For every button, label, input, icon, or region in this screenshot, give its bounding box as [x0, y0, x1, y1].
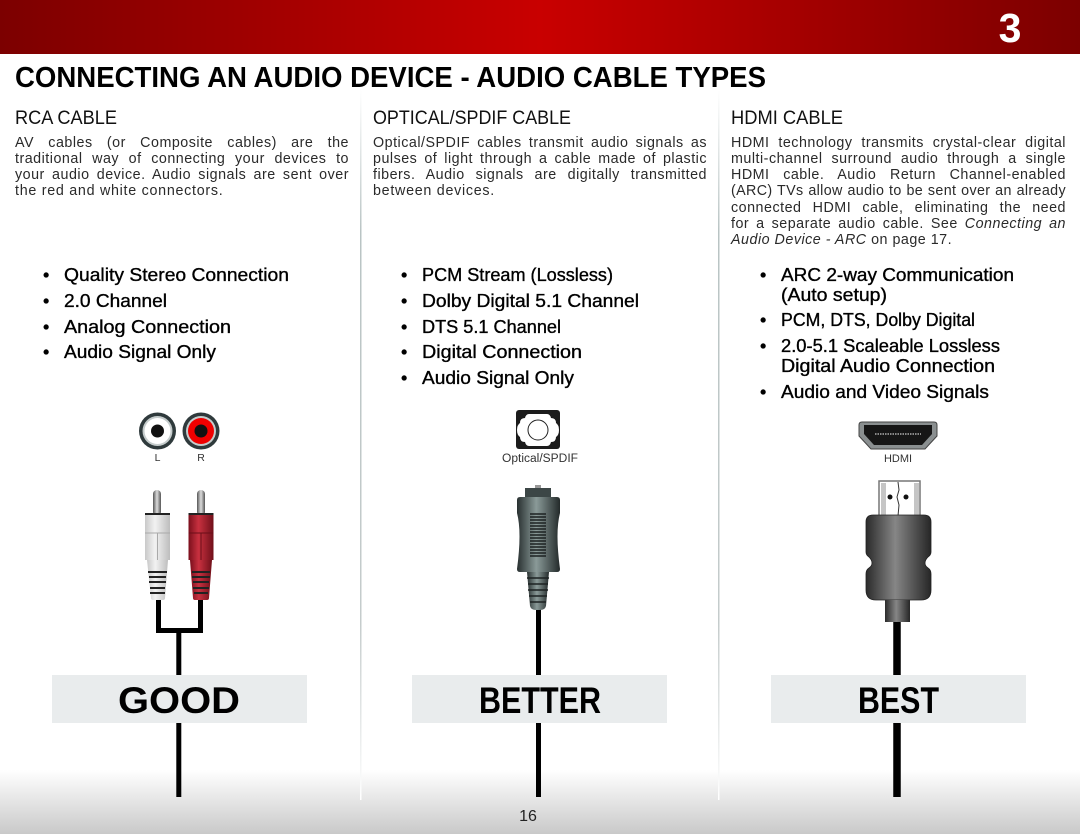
bullet list: Optical features: •: [401, 265, 407, 285]
bullet list: HDMI features: (Auto setup): [781, 285, 887, 305]
bullet list: RCA features: 2.0 Channel: [64, 291, 167, 311]
icon: RCA L and R jacks: R: [197, 452, 205, 464]
rating band: BETTER: [412, 675, 667, 723]
bullet list: Optical features: Audio Signal Only: [422, 368, 574, 388]
bullet list: RCA features: Quality Stereo Connection: [64, 265, 289, 285]
panel: HDMI cable: [730, 108, 1066, 797]
bullet list: HDMI features: •: [760, 265, 766, 285]
rating band: BEST: BEST: [858, 680, 939, 721]
bullet list: HDMI features: [760, 265, 1014, 402]
bullet list: HDMI features: Digital Audio Connection: [781, 356, 995, 376]
description: RCA: AV cables (or Composite cables) are the: [15, 135, 349, 151]
description: Optical/SPDIF: Optical/SPDIF cables transmit audio signals as: [373, 135, 707, 151]
bullet list: Optical features: •: [401, 317, 407, 337]
bullet list: RCA features: •: [43, 317, 49, 337]
bullet list: HDMI features: •: [760, 310, 766, 330]
description: RCA: traditional way of connecting your devices to: [15, 151, 349, 167]
icon: HDMI socket: HDMI: [884, 453, 912, 465]
bullet list: Optical features: Digital Connection: [422, 342, 582, 362]
icon: optical cable: [517, 485, 560, 797]
page number: 16: [519, 808, 537, 825]
bullet list: HDMI features: PCM, DTS, Dolby Digital: [781, 310, 975, 330]
bullet list: HDMI features: •: [760, 382, 766, 402]
icon: HDMI socket: [859, 422, 937, 465]
bullet list: HDMI features: ARC 2-way Communication: [781, 265, 1014, 285]
bullet list: RCA features: Analog Connection: [64, 317, 231, 337]
heading: RCA cable: RCA CABLE: [15, 108, 117, 129]
description: Optical/SPDIF: between devices.: [373, 183, 495, 199]
description: HDMI: HDMI cable. Audio Return Channel-enabled: [731, 167, 1066, 183]
icon: RCA Y cable: [145, 490, 214, 797]
chapter number: 3: [999, 5, 1021, 51]
bullet list: Optical features: •: [401, 342, 407, 362]
bullet list: Optical features: •: [401, 291, 407, 311]
bullet list: RCA features: •: [43, 265, 49, 285]
description: HDMI: connected HDMI cable, eliminating the need: [731, 200, 1066, 216]
heading: Optical/SPDIF cable: OPTICAL/SPDIF CABLE: [373, 108, 571, 129]
bullet list: Optical features: [401, 265, 639, 388]
heading: HDMI cable: HDMI CABLE: [731, 108, 843, 129]
panel: RCA cable: [15, 108, 349, 797]
description: Optical/SPDIF: pulses of light through a cable made of plastic: [373, 151, 707, 167]
rating band: BETTER: BETTER: [479, 680, 601, 721]
description: RCA: your audio device. Audio signals are sent over: [15, 167, 349, 183]
bullet list: RCA features: •: [43, 291, 49, 311]
bullet list: Optical features: DTS 5.1 Channel: [422, 317, 561, 337]
icon: HDMI cable: [866, 481, 931, 797]
panel: Optical/SPDIF cable: [373, 108, 707, 797]
description: HDMI: (ARC) TVs allow audio to be sent over an already: [731, 183, 1066, 199]
description: RCA: the red and white connectors.: [15, 183, 223, 199]
icon: optical socket: [502, 410, 578, 465]
bullet list: RCA features: [43, 265, 289, 362]
bullet list: Optical features: Dolby Digital 5.1 Channel: [422, 291, 639, 311]
description: Optical/SPDIF: fibers. Audio signals are digitally transmitted: [373, 167, 707, 183]
bullet list: Optical features: PCM Stream (Lossless): [422, 265, 613, 285]
icon: RCA L and R jacks: [139, 412, 220, 464]
description: HDMI: multi-channel surround audio through a single: [731, 151, 1066, 167]
description: RCA: [15, 135, 349, 199]
icon: optical socket: Optical/SPDIF: [502, 453, 578, 465]
rating band: GOOD: [52, 675, 307, 723]
description: HDMI: HDMI technology transmits crystal-clear digital: [731, 135, 1066, 151]
icon: RCA L and R jacks: L: [155, 452, 161, 464]
bullet list: RCA features: Audio Signal Only: [64, 342, 216, 362]
rating band: BEST: [771, 675, 1026, 723]
bullet list: HDMI features: Audio and Video Signals: [781, 382, 989, 402]
description: HDMI: for a separate audio cable. See Connecting an: [731, 216, 1066, 232]
description: HDMI: Audio Device - ARC on page 17.: [731, 232, 952, 248]
bullet list: RCA features: •: [43, 342, 49, 362]
bullet list: Optical features: •: [401, 368, 407, 388]
rating band: GOOD: GOOD: [118, 680, 240, 721]
description: HDMI: [730, 135, 1066, 248]
bullet list: HDMI features: 2.0-5.1 Scaleable Lossless: [781, 336, 1000, 356]
bullet list: HDMI features: •: [760, 336, 766, 356]
description: Optical/SPDIF: [373, 135, 707, 199]
